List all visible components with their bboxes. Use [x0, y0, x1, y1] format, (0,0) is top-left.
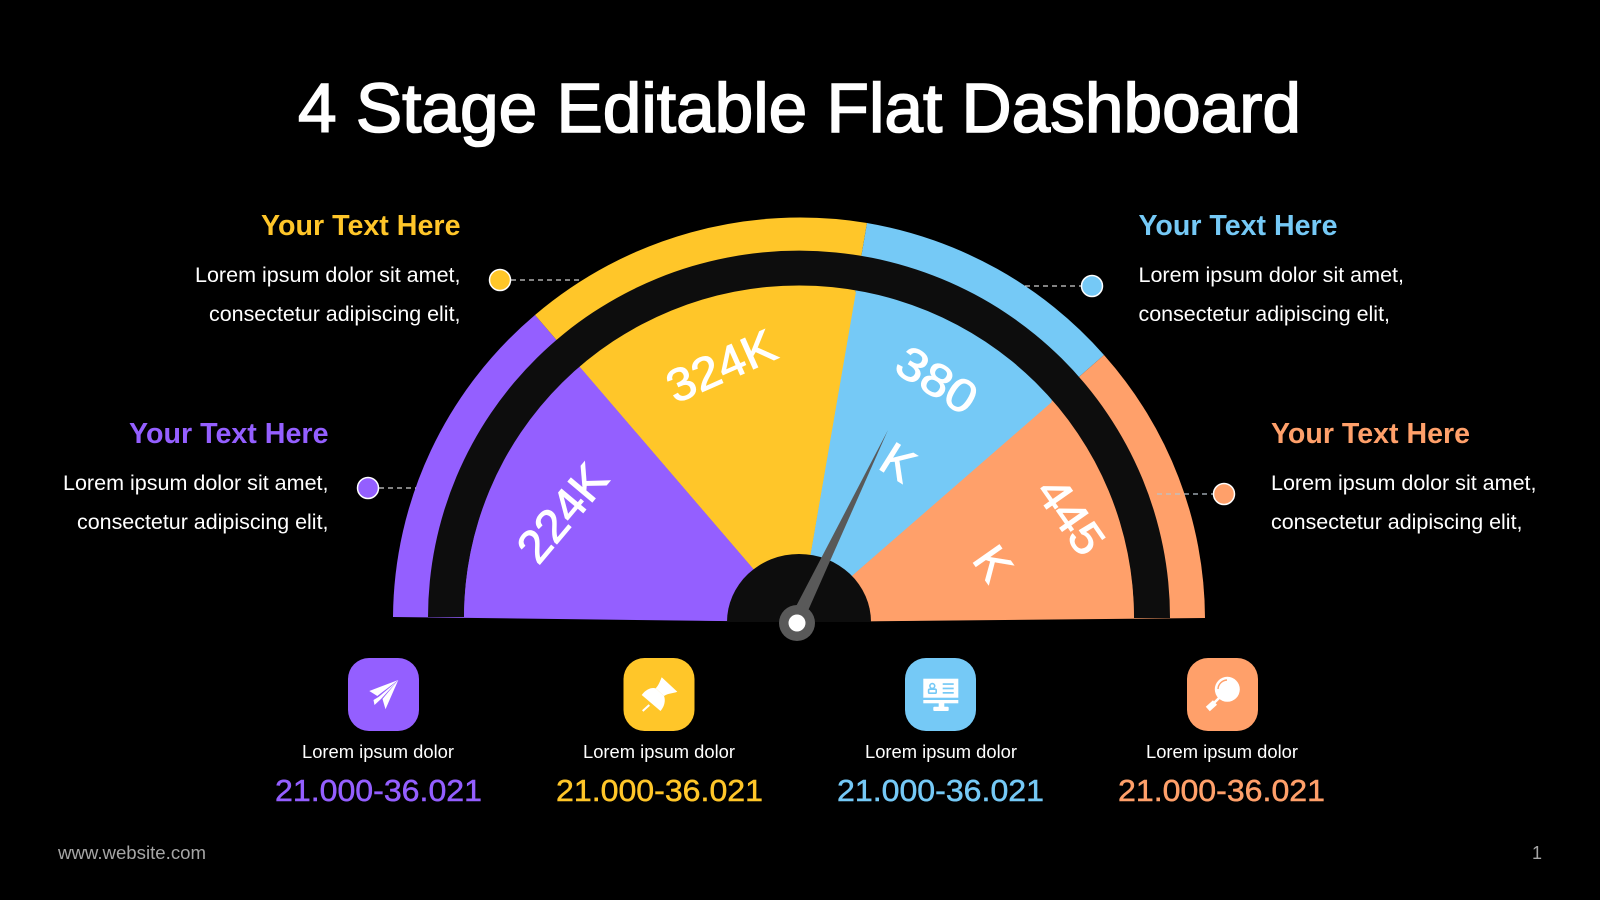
inner wedge: purple [464, 367, 799, 622]
icon: magnifier [1187, 658, 1258, 731]
heading: Your Text Here [1271, 418, 1470, 450]
range value: 21.000-36.021 [556, 773, 763, 808]
leader dot [1025, 276, 1102, 296]
value 380: 380 [887, 335, 987, 425]
label: Lorem ipsum dolor [1146, 741, 1298, 762]
range value: 21.000-36.021 [837, 773, 1044, 808]
stat: yellow [556, 658, 763, 808]
gauge outer band: orange [799, 355, 1205, 622]
body text [1138, 263, 1404, 326]
body text: Lorem ipsum dolor sit amet, [1138, 263, 1404, 287]
label: Lorem ipsum dolor [583, 741, 735, 762]
leader dot [358, 478, 416, 498]
gauge outer band: yellow [535, 218, 867, 622]
value 324K: 324K [658, 319, 784, 413]
title: 4 Stage Editable Flat Dashboard [298, 69, 1301, 147]
body text: Lorem ipsum dolor sit amet, [63, 471, 328, 495]
inner wedge: yellow [580, 287, 856, 622]
body text: consectetur adipiscing elit, [209, 302, 460, 326]
callout: orange [1157, 418, 1536, 534]
body text: consectetur adipiscing elit, [77, 510, 328, 534]
gauge outer band: purple [393, 315, 799, 622]
gauge chart [393, 218, 1205, 641]
callout: yellow [195, 210, 581, 326]
gauge dark ring [428, 251, 1170, 618]
value 380 unit K: K [872, 432, 925, 493]
icon: paper plane [348, 658, 419, 731]
body text: consectetur adipiscing elit, [1271, 510, 1522, 534]
body text: Lorem ipsum dolor sit amet, [1271, 471, 1536, 495]
label: Lorem ipsum dolor [865, 741, 1017, 762]
heading: Your Text Here [261, 210, 460, 242]
gauge needle [779, 430, 888, 641]
gauge outer band: blue [799, 223, 1104, 622]
icon: monitor [905, 658, 976, 731]
page number: 1 [1532, 843, 1542, 863]
gauge hub [727, 554, 871, 622]
inner wedge: blue [799, 292, 1052, 622]
stat: purple [275, 658, 482, 808]
body text [63, 471, 328, 534]
range value: 21.000-36.021 [1118, 773, 1325, 808]
inner wedge: orange [799, 402, 1134, 622]
icon: push pin [624, 658, 694, 731]
footer website: www.website.com [57, 843, 206, 863]
callout: blue [1025, 210, 1404, 326]
stat: orange [1118, 658, 1325, 808]
body text: Lorem ipsum dolor sit amet, [195, 263, 460, 287]
value 445 unit K: K [963, 536, 1023, 591]
body text [1271, 471, 1536, 534]
leader dot [490, 270, 581, 290]
heading: Your Text Here [129, 418, 328, 450]
label: Lorem ipsum dolor [302, 741, 454, 762]
leader dot [1157, 484, 1234, 504]
body text: consectetur adipiscing elit, [1138, 302, 1390, 326]
callout: purple [63, 418, 416, 534]
body text [195, 263, 460, 326]
stat: blue [837, 658, 1044, 808]
value 224K: 224K [506, 453, 618, 573]
range value: 21.000-36.021 [275, 773, 482, 808]
heading: Your Text Here [1138, 210, 1338, 242]
value 445: 445 [1026, 468, 1116, 564]
